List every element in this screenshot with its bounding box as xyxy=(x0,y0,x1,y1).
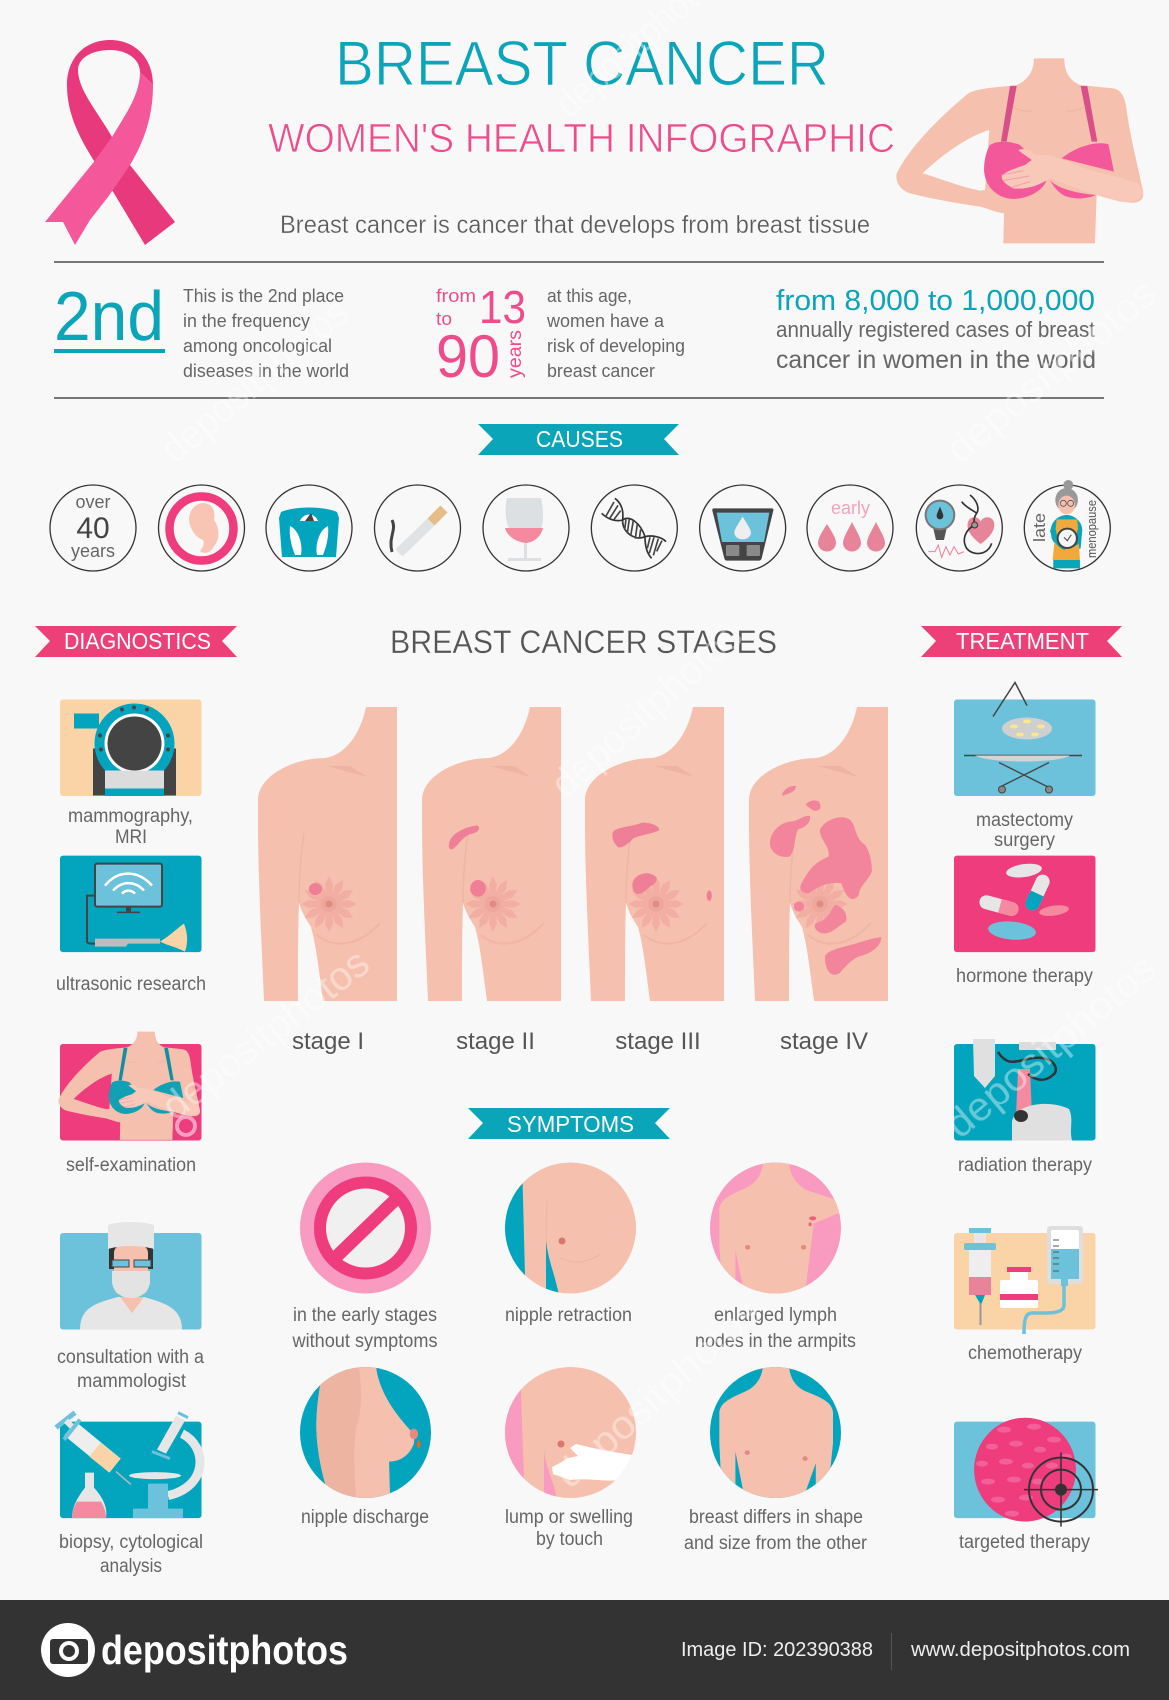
treatment: hormone therapy: hormone therapy xyxy=(956,966,1093,987)
watermark: depositphotos xyxy=(153,941,378,1129)
cause: smoking xyxy=(374,485,460,571)
stat: from 13 to 90 years: from xyxy=(436,286,476,306)
panel: stage II xyxy=(422,707,561,1055)
diagnostic: self-examination: self-examination xyxy=(66,1155,196,1176)
symptom: nipple discharge: nipple discharge xyxy=(301,1507,429,1528)
stat: 2nd place: 2nd xyxy=(54,277,164,355)
banner: causes xyxy=(478,424,679,455)
symptom: nipple retraction: nipple retraction xyxy=(505,1305,632,1326)
label: late menopause: late xyxy=(1030,513,1049,542)
treatment: chemotherapy xyxy=(954,1226,1096,1364)
footer bar: www.depositphotos.com xyxy=(910,1639,1130,1661)
stat: from 13 to 90 years: women have a xyxy=(546,310,665,331)
watermark xyxy=(153,0,1165,1497)
banner: treatment: TREATMENT xyxy=(956,628,1089,654)
diagnostic: mammography: mammography, xyxy=(68,806,193,827)
cause: early menstruation: early xyxy=(831,498,870,518)
symptom: enlarged lymph nodes: nodes in the armpits xyxy=(695,1331,856,1352)
treatment: mastectomy xyxy=(954,682,1096,851)
panel: stage I: stage I xyxy=(292,1028,364,1055)
diagnostic: consultation: mammologist xyxy=(77,1371,187,1392)
subtitle: WOMEN'S HEALTH INFOGRAPHIC xyxy=(268,115,895,161)
stat: 2nd place: in the frequency xyxy=(183,310,311,331)
watermark: depositphotos xyxy=(938,271,1165,472)
cause: over 40 years: years xyxy=(71,541,115,561)
panel: stage II: stage II xyxy=(456,1028,535,1055)
stat: from 13 to 90 years xyxy=(436,281,685,390)
cause: alcohol xyxy=(483,485,569,571)
diagnostic: biopsy xyxy=(56,1413,203,1577)
stat: from 13 to 90 years: breast cancer xyxy=(547,360,655,381)
symptom: lump or swelling xyxy=(500,1365,640,1550)
symptom: no symptoms: without symptoms xyxy=(292,1331,438,1352)
banner: symptoms xyxy=(468,1108,670,1139)
diagnostic: mammography xyxy=(60,700,202,848)
panel: stage I xyxy=(258,707,397,1055)
tagline: Breast cancer is cancer that develops from breast tissue xyxy=(280,211,870,239)
treatment: targeted therapy xyxy=(954,1418,1098,1553)
symptom: lump or swelling: lump or swelling xyxy=(505,1507,633,1528)
diagnostic: ultrasound: ultrasonic research xyxy=(56,974,206,995)
stat: registered cases: annually registered cases of breast xyxy=(776,317,1095,342)
treatment: targeted therapy: targeted therapy xyxy=(959,1532,1090,1553)
cause: over 40 years: 40 xyxy=(76,512,110,545)
banner: symptoms: SYMPTOMS xyxy=(507,1111,634,1137)
stat: from 13 to 90 years: at this age, xyxy=(547,285,632,306)
footer bar: depositphotos xyxy=(101,1627,348,1673)
symptom: breast differs xyxy=(684,1363,868,1554)
symptom: enlarged lymph nodes: enlarged lymph xyxy=(714,1305,837,1326)
banner: diagnostics xyxy=(35,626,237,657)
cause: over 40 years xyxy=(50,485,136,571)
cause: late menopause xyxy=(1024,480,1110,571)
symptom: no symptoms xyxy=(292,1162,438,1352)
footer bar: Image ID: 202390388 xyxy=(681,1639,873,1661)
footer bar xyxy=(0,1600,1169,1700)
treatment: hormone therapy xyxy=(954,856,1096,987)
stat: registered cases: cancer in women in the world xyxy=(776,346,1096,374)
watermark: depositphotos xyxy=(547,1290,769,1497)
treatment: mastectomy: surgery xyxy=(994,830,1055,851)
panel: stage IV xyxy=(749,707,888,1055)
panel: stage IV: stage IV xyxy=(780,1028,868,1055)
stat: from 13 to 90 years: years xyxy=(505,330,526,378)
stat: registered cases xyxy=(776,285,1096,374)
icon: pink awareness ribbon xyxy=(45,40,175,245)
diagnostic: consultation: consultation with a xyxy=(57,1347,204,1368)
cause: weight xyxy=(266,485,352,571)
stat: 2nd place: among oncological xyxy=(183,335,332,356)
cause: early menstruation xyxy=(807,485,893,571)
symptom: nipple retraction xyxy=(500,1160,636,1326)
stat: registered cases: from 8,000 to 1,000,000 xyxy=(776,285,1095,317)
symptom: breast differs: and size from the other xyxy=(684,1533,868,1554)
symptom: enlarged lymph nodes xyxy=(695,1160,856,1352)
banner: treatment xyxy=(921,626,1122,657)
stat: 2nd place: This is the 2nd place xyxy=(183,285,344,306)
watermark: depositphotos xyxy=(153,290,357,472)
stat: 2nd place xyxy=(54,277,349,381)
cause: genetics xyxy=(591,485,677,571)
diagnostic: ultrasound xyxy=(56,856,206,995)
treatment: chemotherapy: chemotherapy xyxy=(968,1343,1082,1364)
cause: pregnancy xyxy=(158,485,244,571)
diagnostic: consultation xyxy=(57,1222,204,1392)
panel: stage III xyxy=(585,707,724,1055)
symptom: no symptoms: in the early stages xyxy=(293,1305,437,1326)
watermark: depositphotos xyxy=(938,946,1165,1147)
stat: from 13 to 90 years: to xyxy=(436,309,452,329)
stat: from 13 to 90 years: 13 xyxy=(479,281,526,333)
cause: diabetes device xyxy=(700,485,786,571)
cause: hypertension xyxy=(916,485,1002,571)
icon: logo camera xyxy=(41,1623,95,1677)
diagnostic: self-examination xyxy=(59,1032,201,1176)
diagnostic: mammography: MRI xyxy=(115,827,147,848)
icon: woman holding chest xyxy=(896,58,1143,243)
panel: stage III: stage III xyxy=(615,1028,701,1055)
heading: stages: BREAST CANCER STAGES xyxy=(390,624,777,660)
diagnostic: biopsy: analysis xyxy=(100,1556,162,1577)
banner: diagnostics: DIAGNOSTICS xyxy=(64,628,211,654)
watermark: depositphotos xyxy=(543,613,750,807)
treatment: mastectomy: mastectomy xyxy=(976,810,1073,831)
symptom: breast differs: breast differs in shape xyxy=(689,1507,863,1528)
label: late menopause xyxy=(1030,500,1099,558)
stat: from 13 to 90 years: 90 xyxy=(436,323,500,390)
label: late menopause: menopause xyxy=(1085,500,1099,558)
banner: causes: CAUSES xyxy=(536,426,623,452)
treatment: radiation therapy xyxy=(954,1039,1096,1176)
symptom: nipple discharge xyxy=(300,1363,432,1528)
stat: from 13 to 90 years: risk of developing xyxy=(547,335,685,356)
cause: over 40 years: over xyxy=(75,492,111,512)
treatment: radiation therapy: radiation therapy xyxy=(958,1155,1092,1176)
title: BREAST CANCER xyxy=(335,29,829,99)
divider bottom xyxy=(54,397,1104,399)
diagnostic: biopsy: biopsy, cytological xyxy=(59,1532,203,1553)
stat: 2nd place: diseases in the world xyxy=(183,360,349,381)
divider top xyxy=(54,261,1104,263)
symptom: lump or swelling: by touch xyxy=(536,1529,603,1550)
